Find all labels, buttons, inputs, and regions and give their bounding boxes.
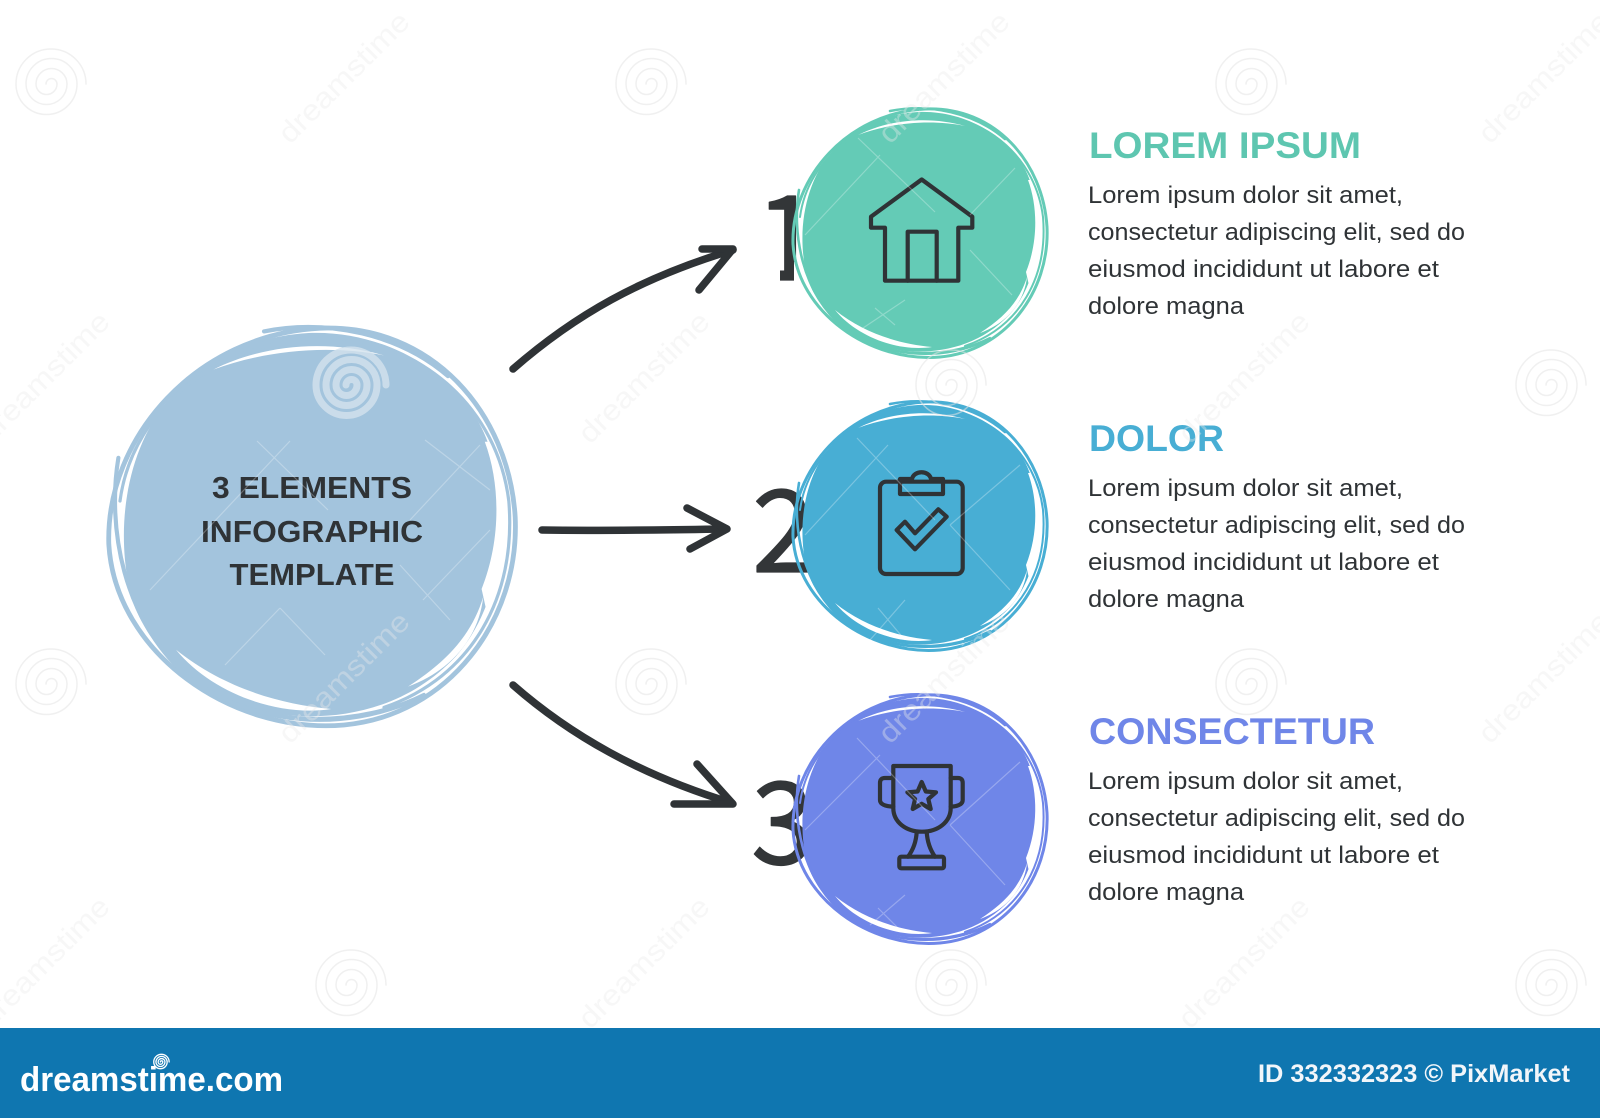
- heading: consectetur: CONSECTETUR: [1089, 711, 1375, 752]
- body: lorem ipsum: eiusmod incididunt ut labore et: [1088, 256, 1439, 283]
- central title: INFOGRAPHIC: [201, 514, 423, 549]
- image id and credit: ID 332332323 © PixMarket: [1258, 1060, 1571, 1088]
- central title: 3 ELEMENTS: [212, 470, 412, 505]
- panel: central circle: [109, 327, 515, 726]
- scribble circle: green: [793, 108, 1047, 357]
- central title: TEMPLATE: [230, 557, 394, 592]
- arrow 2: to element two: [542, 508, 727, 549]
- heading: lorem ipsum: LOREM IPSUM: [1089, 125, 1361, 166]
- body: dolor: eiusmod incididunt ut labore et: [1088, 549, 1439, 576]
- heading: dolor: DOLOR: [1089, 418, 1224, 459]
- panel: element 2 circle: [793, 401, 1047, 650]
- body: consectetur: Lorem ipsum dolor sit amet,: [1088, 768, 1403, 795]
- body: consectetur: consectetur adipiscing elit, sed do: [1088, 805, 1465, 832]
- text block: dolor: [1088, 418, 1465, 613]
- icon: house: [871, 180, 972, 281]
- body: consectetur: dolore magna: [1088, 879, 1245, 906]
- body: consectetur: eiusmod incididunt ut labore et: [1088, 842, 1439, 869]
- watermark text: dreamstime: [872, 606, 1017, 750]
- scribble circle: central: [109, 327, 515, 726]
- body: dolor: Lorem ipsum dolor sit amet,: [1088, 475, 1403, 502]
- scribble circle: blue: [793, 401, 1047, 650]
- body: lorem ipsum: [1088, 182, 1465, 320]
- panel: element 1 circle: [793, 108, 1047, 357]
- text block: consectetur: [1088, 711, 1465, 906]
- watermark text: dreamstime: [1172, 306, 1317, 450]
- number 3: 3: [751, 732, 814, 897]
- watermark text: dreamstime: [1472, 6, 1600, 150]
- dreamstime logo: dreamstime.com: [20, 1061, 283, 1099]
- arrow 3: to element three: [513, 685, 733, 804]
- watermark text: dreamstime: [572, 891, 717, 1035]
- body: dolor: [1088, 475, 1465, 613]
- watermark text: dreamstime: [272, 606, 417, 750]
- number 1: 1: [755, 143, 820, 314]
- body: dolor: consectetur adipiscing elit, sed do: [1088, 512, 1465, 539]
- icon: clipboard with check: [880, 472, 963, 574]
- arrow 1: to element one: [513, 249, 733, 369]
- body: consectetur: [1088, 768, 1465, 906]
- watermark text: dreamstime: [272, 6, 417, 150]
- body: dolor: dolore magna: [1088, 586, 1245, 613]
- text block: lorem ipsum: [1088, 125, 1465, 320]
- body: lorem ipsum: Lorem ipsum dolor sit amet,: [1088, 182, 1403, 209]
- icon: trophy: [880, 766, 963, 868]
- body: lorem ipsum: dolore magna: [1088, 293, 1245, 320]
- watermark text: dreamstime: [1472, 606, 1600, 750]
- footer bar: [0, 1028, 1600, 1118]
- watermark text: dreamstime: [572, 306, 717, 450]
- scribble circle: indigo: [793, 694, 1047, 943]
- watermark text: dreamstime: [1172, 891, 1317, 1035]
- watermark text: dreamstime: [872, 6, 1017, 150]
- number 2: 2: [752, 440, 815, 605]
- watermark spiral on central circle: [316, 350, 386, 415]
- panel: element 3 circle: [793, 694, 1047, 943]
- central title: [201, 470, 423, 592]
- body: lorem ipsum: consectetur adipiscing elit, sed do: [1088, 219, 1465, 246]
